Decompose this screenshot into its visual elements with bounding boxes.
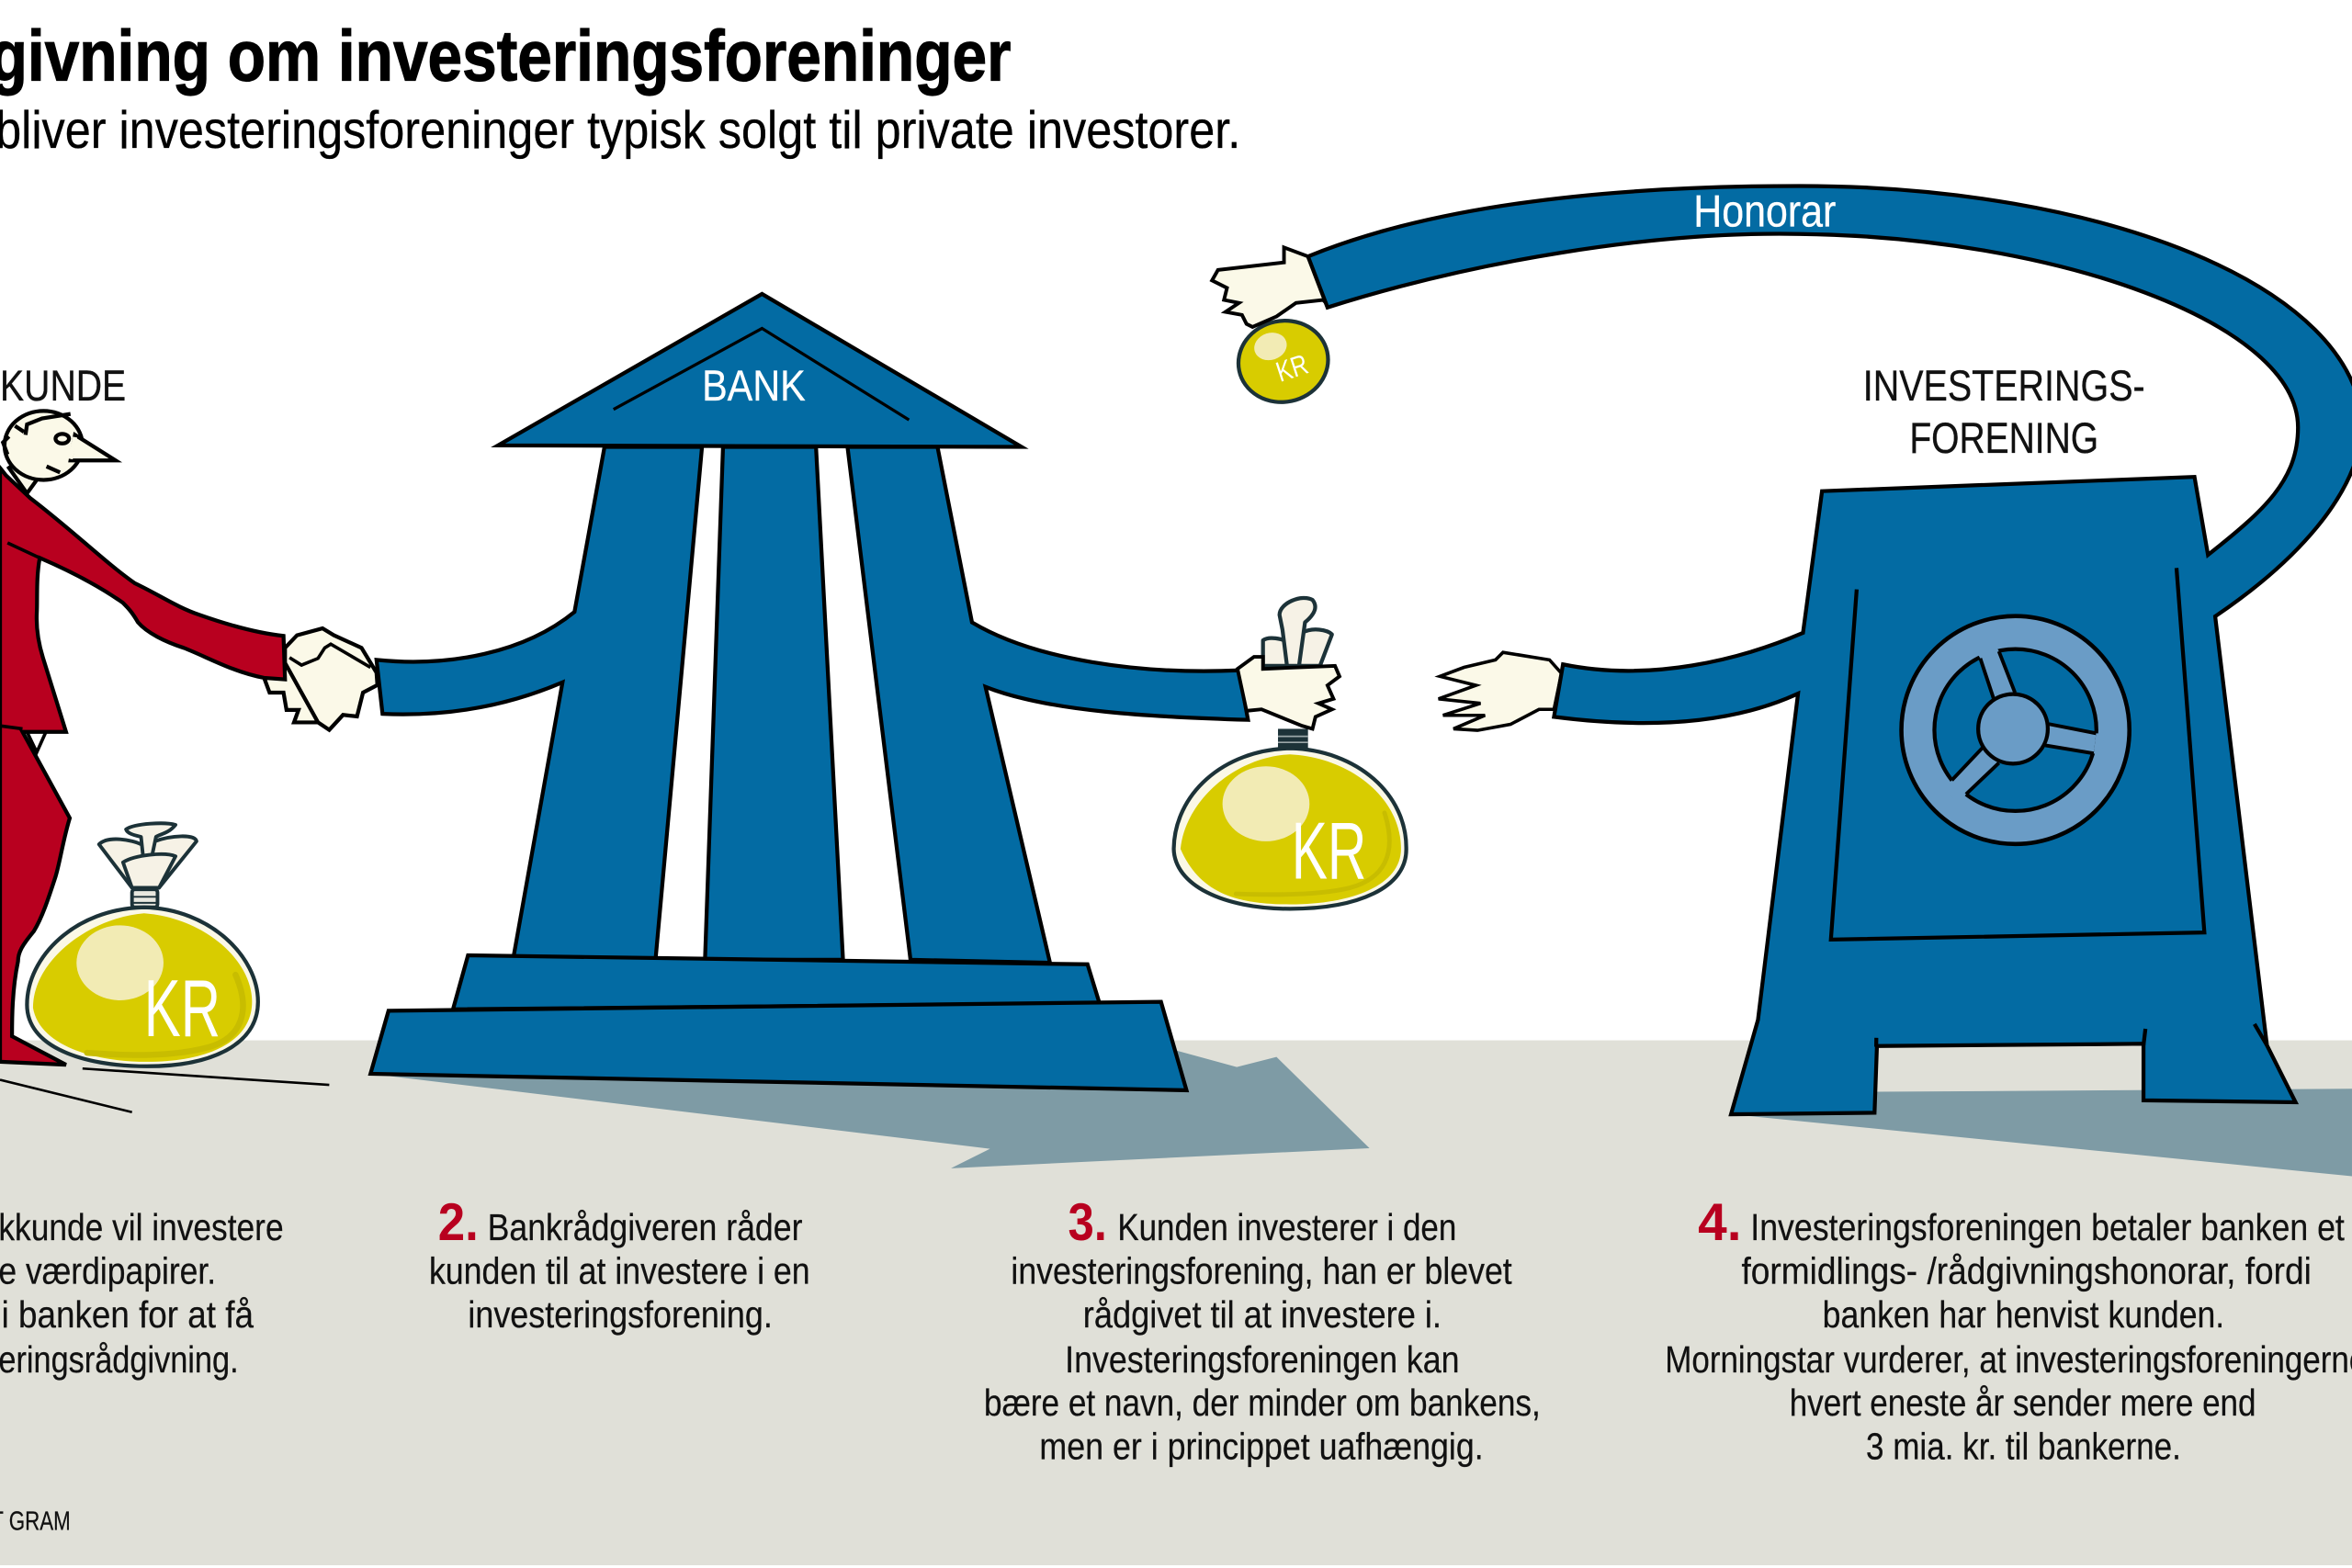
customer figure <box>0 411 337 1065</box>
text block: step 4 <box>1665 1193 2352 1468</box>
cloth in bank hand <box>1263 598 1332 666</box>
hand: bank hand holding bag <box>1238 657 1340 728</box>
text block: step 2 <box>429 1193 810 1336</box>
label: honorar: Honorar <box>1693 187 1836 237</box>
coin <box>1231 312 1336 411</box>
safe door <box>1831 568 2267 1047</box>
bag: money bag held by bank: KR <box>1292 806 1366 897</box>
text block: step 3: investeringsforening, han er blevet <box>1011 1250 1512 1292</box>
text block: step 3: bære et navn, der minder om bankens, <box>984 1382 1541 1424</box>
bag: money bag held by bank <box>1174 728 1407 908</box>
suit <box>0 468 285 1065</box>
safe wheel <box>1902 616 2130 844</box>
text block: step 4: 4. <box>1698 1193 1742 1252</box>
shadow: safe <box>1731 1089 2352 1176</box>
bag tie cloth <box>99 823 197 908</box>
bag: left money bag: KR <box>144 963 220 1054</box>
label: investeringsforening: FORENING <box>1909 414 2098 463</box>
bank building <box>370 294 1248 1090</box>
text block: step 3: 3. <box>1068 1193 1107 1252</box>
coin: KR <box>1272 348 1312 389</box>
text block: step 1 <box>0 1206 284 1381</box>
bank column: right with arm <box>847 447 1248 963</box>
bank column: middle <box>705 447 843 960</box>
handshake: bank hand <box>285 628 378 730</box>
text block: step 4: banken har henvist kunden. <box>1823 1293 2224 1336</box>
label: investeringsforening: INVESTERINGS- <box>1863 362 2145 411</box>
text block: step 4: hvert eneste år sender mere end <box>1790 1382 2256 1424</box>
shadow: bank <box>370 1035 1370 1168</box>
neck <box>9 459 37 493</box>
text block: step 1: eringsrådgivning. <box>0 1338 239 1381</box>
text block: step 1: i banken for at få <box>2 1293 254 1336</box>
text block: step 2: investeringsforening. <box>468 1293 773 1336</box>
bank roof <box>498 294 1022 447</box>
hand: hand dropping coin <box>1212 247 1328 327</box>
head <box>3 411 116 479</box>
text block: step 3: Kunden investerer i den <box>1117 1206 1456 1248</box>
text block: step 3: men er i princippet uafhængig. <box>1039 1426 1484 1468</box>
bag: left money bag <box>27 823 258 1066</box>
title: givning om investeringsforeninger <box>0 15 1011 96</box>
text block: step 2: kunden til at investere i en <box>429 1250 810 1292</box>
label: kunde: KUNDE <box>0 362 126 411</box>
text block: step 1: kkunde vil investere <box>0 1206 284 1248</box>
bank steps <box>453 955 1100 1010</box>
text block: step 1: e værdipapirer. <box>0 1250 216 1292</box>
ground band <box>0 1041 2352 1565</box>
text block: step 3 <box>984 1193 1541 1468</box>
text block: step 3: rådgivet til at investere i. <box>1083 1293 1442 1336</box>
handshake: customer hand <box>265 637 337 722</box>
subtitle: bliver investeringsforeninger typisk solgt til private investorer. <box>0 101 1240 160</box>
label: bank: BANK <box>702 362 806 411</box>
text block: step 2: Bankrådgiveren råder <box>488 1206 802 1248</box>
text block: step 3: Investeringsforeningen kan <box>1065 1338 1460 1381</box>
bag neck <box>1278 728 1308 749</box>
text block: step 4: 3 mia. kr. til bankerne. <box>1866 1426 2181 1468</box>
text block: step 4: formidlings- /rådgivningshonorar, fordi <box>1742 1250 2312 1292</box>
label: investeringsforening <box>1863 362 2145 463</box>
bank column: left with arm <box>377 447 702 960</box>
safe with arm and honorar tube <box>1308 186 2352 1114</box>
ground lines <box>0 1068 329 1112</box>
hand: safe hand <box>1439 652 1562 730</box>
text block: step 2: 2. <box>438 1193 479 1252</box>
